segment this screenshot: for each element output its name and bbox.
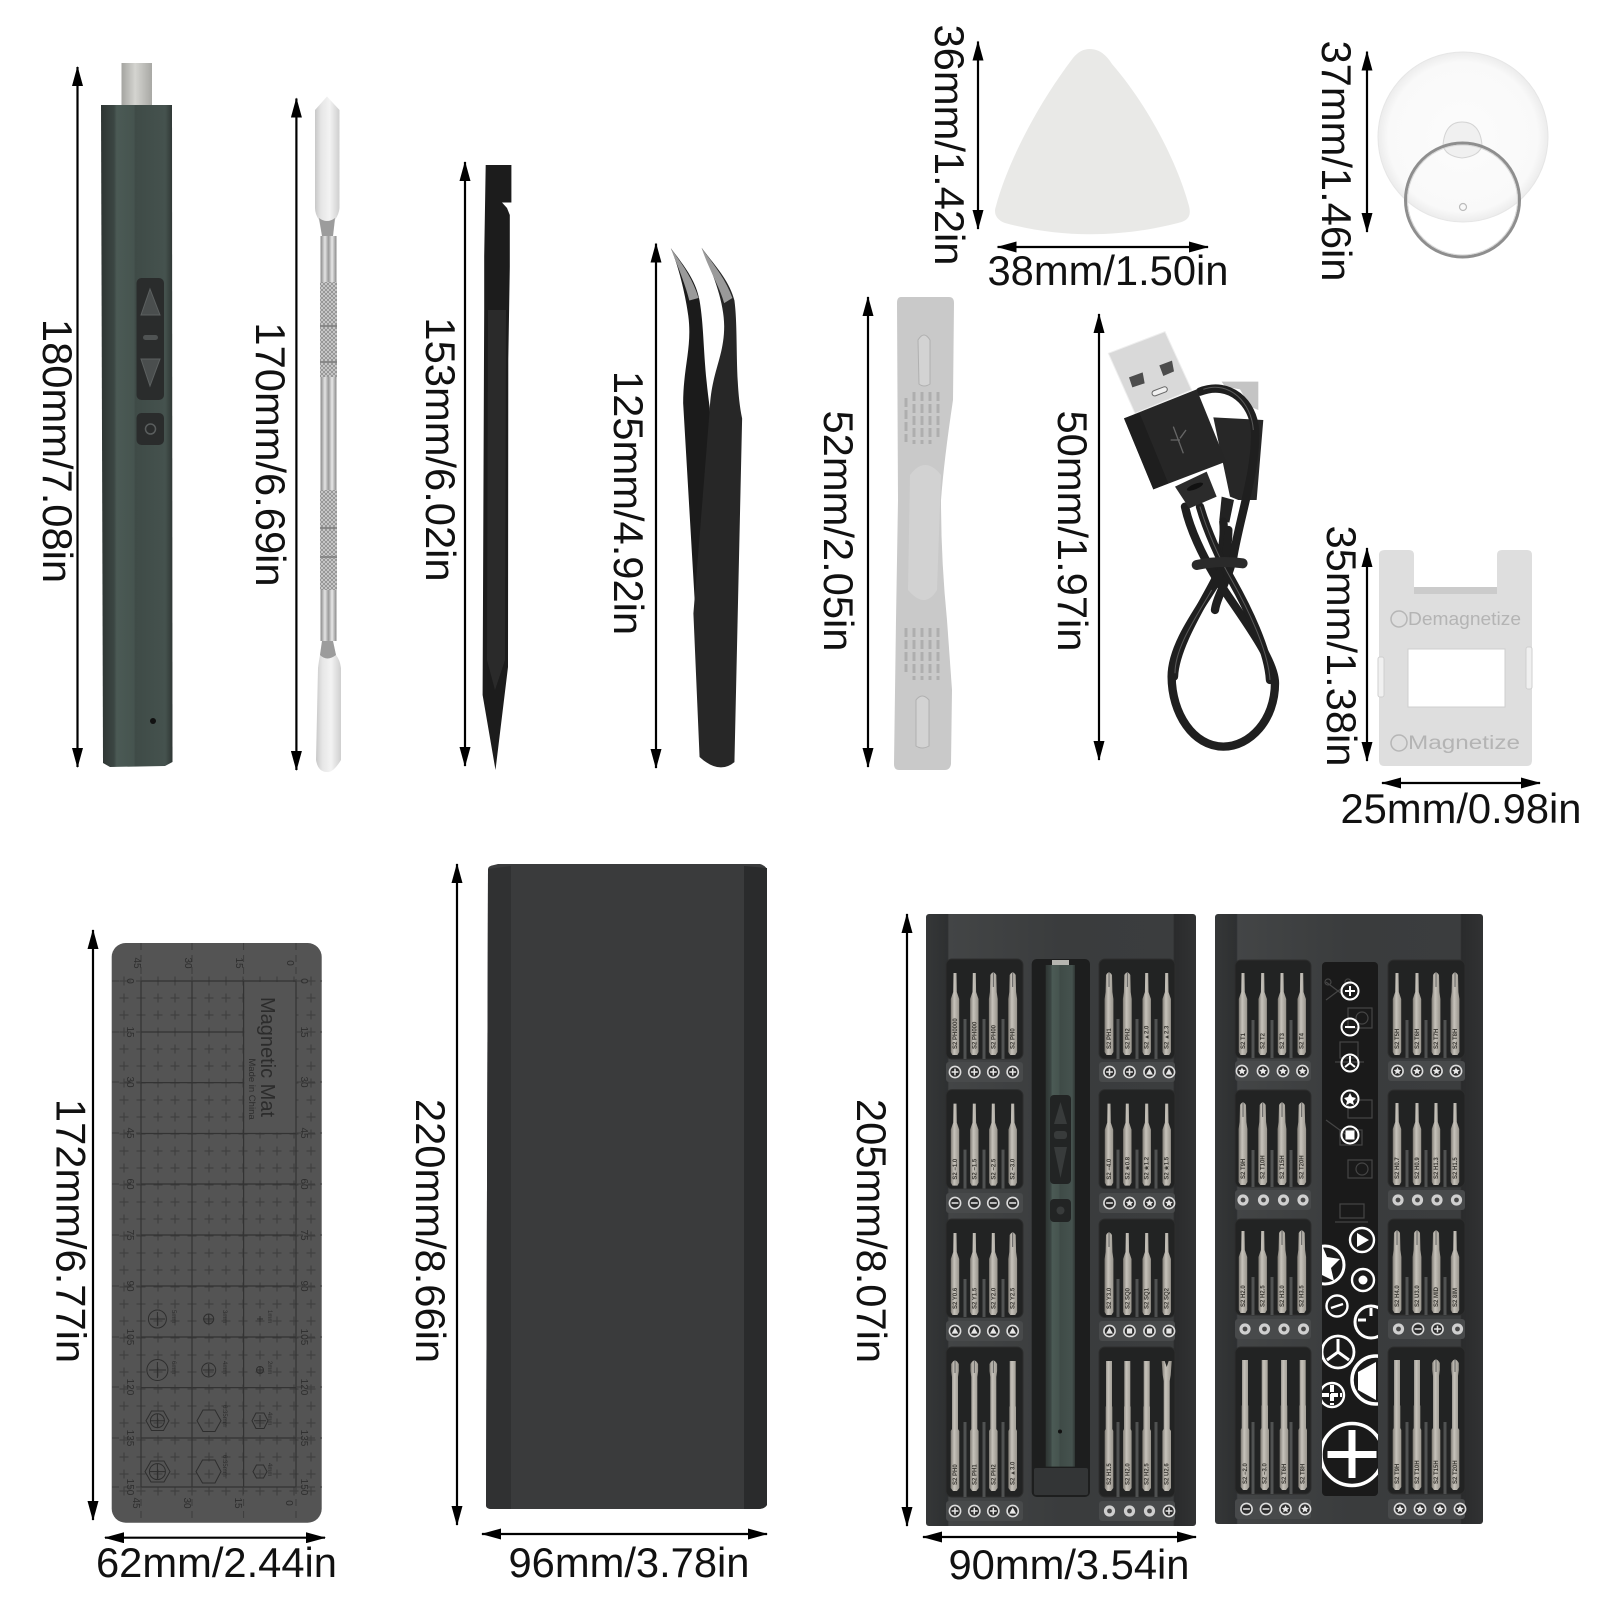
magnetic mat: 15	[233, 957, 244, 969]
well: PH precision bits: S2 PH000	[972, 1021, 978, 1049]
arrow: magnetizer width	[1382, 782, 1540, 784]
grey opening tool	[894, 297, 954, 770]
magnetizer block: Magnetize	[1408, 733, 1520, 754]
label: mat width: 62mm/2.44in	[96, 1539, 337, 1586]
open tray left	[926, 914, 1196, 1526]
arrow: tray height	[906, 914, 908, 1526]
well: long slotted and torx bits: S2 −3.0	[1263, 1462, 1269, 1484]
label: pick height: 36mm/1.42in	[926, 24, 973, 266]
well: torx H bits: S2 T9H	[1241, 1159, 1247, 1179]
arrow: cable height	[1098, 314, 1100, 760]
well: long PH bits: S2 PH1	[972, 1464, 978, 1485]
magnetic mat: 6.35mm	[221, 1405, 227, 1427]
label: tweezers height: 125mm/4.92in	[605, 371, 652, 635]
well: PH and triangle bits	[1099, 959, 1175, 1059]
arrow: tweezers height	[655, 244, 657, 768]
bit type icons: tray left	[949, 1066, 1175, 1517]
arrow: case width	[482, 1533, 767, 1535]
well: PH precision bits: S2 PH0000	[953, 1018, 959, 1049]
suction cup with ring	[1378, 52, 1548, 257]
well: Y and square bits: S2 SQ2	[1165, 1287, 1171, 1309]
well: torx H bits T5-T8	[1388, 960, 1465, 1058]
magnetic mat: 30	[181, 1497, 192, 1509]
well: long torx H bits	[1388, 1347, 1465, 1494]
well: torx bits T1-T4: S2 T1	[1241, 1032, 1247, 1049]
magnetic mat: 120	[298, 1379, 309, 1396]
well: torx H bits T5-T8: S2 T6H	[1415, 1029, 1421, 1049]
well: PH and triangle bits: S2 PH2	[1125, 1028, 1131, 1049]
label: spudger height: 170mm/6.69in	[247, 322, 294, 587]
label: case width: 96mm/3.78in	[508, 1539, 750, 1586]
magnetic mat: 4mm	[266, 1412, 272, 1425]
well: PH precision bits	[946, 959, 1023, 1059]
magnetic mat: 120	[124, 1379, 135, 1396]
well: long PH bits: S2 PH2	[991, 1464, 997, 1485]
well: torx bits T1-T4	[1235, 960, 1311, 1058]
arrow: pick width	[998, 246, 1208, 248]
well: long slotted and torx bits: S2 −2.0	[1243, 1462, 1249, 1484]
magnetic mat: Magnetic Mat	[256, 997, 278, 1117]
magnetic mat: 0	[124, 978, 135, 984]
magnetic mat: 90	[124, 1280, 135, 1292]
magnetic mat: 75	[124, 1229, 135, 1241]
well: torx H bits T5-T8: S2 T8H	[1453, 1029, 1459, 1049]
well: long hex and U bits	[1099, 1347, 1175, 1497]
label: tray height: 205mm/8.07in	[848, 1099, 895, 1363]
magnetic mat	[112, 943, 322, 1523]
well: long hex and U bits: S2 H2.5	[1145, 1463, 1151, 1485]
double ended spudger	[315, 96, 341, 772]
arrow: mat height	[92, 930, 94, 1520]
well: torx H bits: S2 T10H	[1261, 1155, 1267, 1179]
magnetic mat: 5mm	[170, 1310, 176, 1323]
well: Y and square bits: S2 SQ1	[1145, 1287, 1151, 1309]
well: H4, U3, MID and 8IM bits	[1388, 1219, 1465, 1315]
magnetic mat: 45	[131, 957, 142, 969]
well: Y bits: S2 Y2.5	[1011, 1287, 1017, 1309]
well: hex H2-H3.5 bits: S2 H3.0	[1280, 1285, 1286, 1307]
magnetic mat: 15	[298, 1026, 309, 1038]
well: long torx H bits: S2 T15H	[1434, 1460, 1440, 1484]
label: pick width: 38mm/1.50in	[988, 247, 1228, 294]
magnetic mat: 135	[298, 1430, 309, 1447]
magnetic mat: 60	[298, 1178, 309, 1190]
well: Y and square bits: S2 SQ0	[1125, 1287, 1131, 1309]
well: torx H bits: S2 T15H	[1280, 1155, 1286, 1179]
label: opening tool height: 52mm/2.05in	[815, 410, 862, 652]
well: torx bits T1-T4: S2 T3	[1280, 1032, 1286, 1049]
magnetic mat: 4mm	[221, 1361, 227, 1374]
magnetic mat: 0	[298, 978, 309, 984]
magnetic mat: 6mm	[170, 1361, 176, 1374]
electric screwdriver	[101, 63, 172, 767]
well: hex H2-H3.5 bits: S2 H2.5	[1261, 1285, 1267, 1307]
well: hex H2-H3.5 bits: S2 H2.0	[1241, 1285, 1247, 1307]
arrow: opening tool height	[867, 297, 869, 767]
arrow: pick height	[977, 42, 979, 229]
magnetic mat: Made in China	[246, 1058, 257, 1120]
well: PH and triangle bits: S2 ▲2.3	[1165, 1025, 1171, 1049]
magnetizer block: Demagnetize	[1408, 609, 1521, 629]
well: PH precision bits: S2 PH00	[991, 1024, 997, 1049]
magnetic mat: 150	[124, 1479, 135, 1496]
well: hex H2-H3.5 bits: S2 H3.5	[1300, 1285, 1306, 1307]
label: magnetizer width: 25mm/0.98in	[1340, 785, 1582, 832]
well: torx bits T1-T4: S2 T2	[1261, 1032, 1267, 1049]
magnetic mat: 0	[283, 1500, 294, 1506]
label: cable height: 50mm/1.97in	[1049, 410, 1096, 652]
well: slotted and star bits: S2 −4.0	[1107, 1158, 1113, 1180]
arrow: mat width	[105, 1537, 325, 1539]
well: slotted and star bits: S2 ★1.2	[1144, 1156, 1151, 1180]
well: Y and square bits	[1099, 1219, 1175, 1318]
well: long hex and U bits: S2 U2.6	[1165, 1463, 1171, 1485]
well: long slotted and torx bits: S2 T8H	[1301, 1464, 1307, 1484]
triangular pick	[995, 49, 1190, 234]
well: slotted bits: S2 −3.0	[1011, 1158, 1017, 1180]
well: PH precision bits: S2 PH0	[1011, 1028, 1017, 1049]
well: long slotted and torx bits: S2 T6H	[1282, 1464, 1288, 1484]
well: PH and triangle bits: S2 ▲2.0	[1145, 1025, 1151, 1049]
icon strip: tray left	[946, 1062, 1175, 1521]
label: magnetizer height: 35mm/1.38in	[1318, 526, 1365, 766]
magnetizer block	[1378, 550, 1532, 766]
magnetic mat: 1mm	[266, 1310, 272, 1323]
magnetic mat: 105	[124, 1329, 135, 1346]
well: torx H bits T5-T8: S2 T5H	[1395, 1029, 1401, 1049]
tweezers	[671, 248, 742, 767]
well: long torx H bits: S2 T10H	[1415, 1460, 1421, 1484]
magnetic mat: 150	[298, 1479, 309, 1496]
well: long slotted and torx bits	[1235, 1347, 1311, 1494]
magnetic mat: 3mm	[221, 1310, 227, 1323]
USB charging cable	[1108, 332, 1275, 747]
well: Y bits: S2 Y0.6	[953, 1287, 959, 1309]
well: long torx H bits: S2 T9H	[1395, 1464, 1401, 1484]
well: hex H0.7-H1.5 bits: S2 H1.3	[1434, 1157, 1440, 1179]
magnetic mat: 30	[124, 1076, 135, 1088]
magnetic mat: 30	[182, 957, 193, 969]
arrow: driver height	[76, 67, 79, 767]
well: H4, U3, MID and 8IM bits: S2 U3.0	[1415, 1285, 1421, 1307]
magnetic mat: 15	[232, 1497, 243, 1509]
well: hex H2-H3.5 bits	[1235, 1219, 1311, 1315]
well: H4, U3, MID and 8IM bits: S2 MID	[1434, 1286, 1440, 1307]
well: long PH bits	[946, 1347, 1023, 1497]
well: torx bits T1-T4: S2 T4	[1300, 1032, 1306, 1049]
magnetic mat: 75	[298, 1229, 309, 1241]
black nylon pry stick	[483, 165, 511, 770]
bit type icons: tray right	[1236, 1065, 1466, 1515]
well: long PH bits: S2 ▲3.0	[1011, 1461, 1017, 1485]
well: H4, U3, MID and 8IM bits: S2 H4.0	[1395, 1285, 1401, 1307]
well: Y and square bits: S2 Y3.0	[1107, 1287, 1113, 1309]
magnetic mat: 4mm	[266, 1463, 272, 1476]
well: Y bits: S2 Y1.5	[972, 1287, 978, 1309]
well: PH and triangle bits: S2 PH1	[1107, 1028, 1113, 1049]
arrow: case height	[456, 864, 458, 1525]
well: Y bits: S2 Y2.0	[991, 1287, 997, 1309]
closed aluminium case	[486, 864, 767, 1509]
well: hex H0.7-H1.5 bits: S2 H0.9	[1415, 1157, 1421, 1179]
label: case height: 220mm/8.66in	[407, 1099, 454, 1363]
magnetic mat: 0	[284, 960, 295, 966]
well: long hex and U bits: S2 H1.5	[1107, 1463, 1113, 1485]
magnetic mat: 30	[298, 1076, 309, 1088]
magnetic mat: 105	[298, 1329, 309, 1346]
label: suction cup height: 37mm/1.46in	[1313, 40, 1360, 282]
well: torx H bits	[1235, 1090, 1311, 1187]
well: long hex and U bits: S2 H2.0	[1125, 1463, 1131, 1485]
magnetic mat: 135	[124, 1430, 135, 1447]
well: long torx H bits: S2 T20H	[1453, 1460, 1459, 1484]
magnetic mat: 45	[130, 1497, 141, 1509]
well: hex H0.7-H1.5 bits: S2 H0.7	[1395, 1157, 1401, 1179]
magnetic mat: 6.35mm	[221, 1455, 227, 1477]
well: torx H bits T5-T8: S2 T7H	[1434, 1029, 1440, 1049]
magnetic mat: 60	[124, 1178, 135, 1190]
well: Y bits	[946, 1219, 1023, 1318]
well: slotted bits: S2 −1.5	[972, 1158, 978, 1180]
arrow: pry stick height	[464, 162, 466, 766]
label: mat height: 172mm/6.77in	[48, 1099, 94, 1363]
center black panel with bit symbols	[1322, 962, 1378, 1496]
arrow: tray width	[923, 1536, 1196, 1538]
well: torx H bits: S2 T20H	[1300, 1155, 1306, 1179]
well: hex H0.7-H1.5 bits	[1388, 1090, 1465, 1187]
open tray right	[1215, 914, 1483, 1524]
magnetic mat: 45	[298, 1127, 309, 1139]
well: slotted and star bits	[1099, 1090, 1175, 1189]
driver in center well	[1032, 959, 1090, 1497]
well: slotted and star bits: S2 ★0.8	[1124, 1156, 1131, 1180]
magnetic mat: 90	[298, 1280, 309, 1292]
well: slotted and star bits: S2 ★1.5	[1164, 1156, 1171, 1180]
label: pry stick height: 153mm/6.02in	[417, 317, 464, 582]
label: tray width: 90mm/3.54in	[948, 1541, 1190, 1588]
well: slotted bits	[946, 1090, 1023, 1189]
icon strip: tray right	[1235, 1061, 1465, 1519]
label: driver height: 180mm/7.08in	[34, 319, 81, 583]
magnetic mat: 2mm	[266, 1361, 272, 1374]
well: slotted bits: S2 −1.0	[953, 1158, 959, 1180]
arrow: magnetizer height	[1366, 548, 1368, 761]
magnetic mat: 45	[124, 1127, 135, 1139]
magnetic mat: 15	[124, 1026, 135, 1038]
well: slotted bits: S2 −2.5	[991, 1158, 997, 1180]
well: H4, U3, MID and 8IM bits: S2 8IM	[1453, 1288, 1459, 1307]
well: long PH bits: S2 PH0	[953, 1464, 959, 1485]
arrow: spudger height	[295, 98, 297, 770]
well: hex H0.7-H1.5 bits: S2 H1.5	[1453, 1157, 1459, 1179]
arrow: suction cup height	[1366, 52, 1368, 232]
